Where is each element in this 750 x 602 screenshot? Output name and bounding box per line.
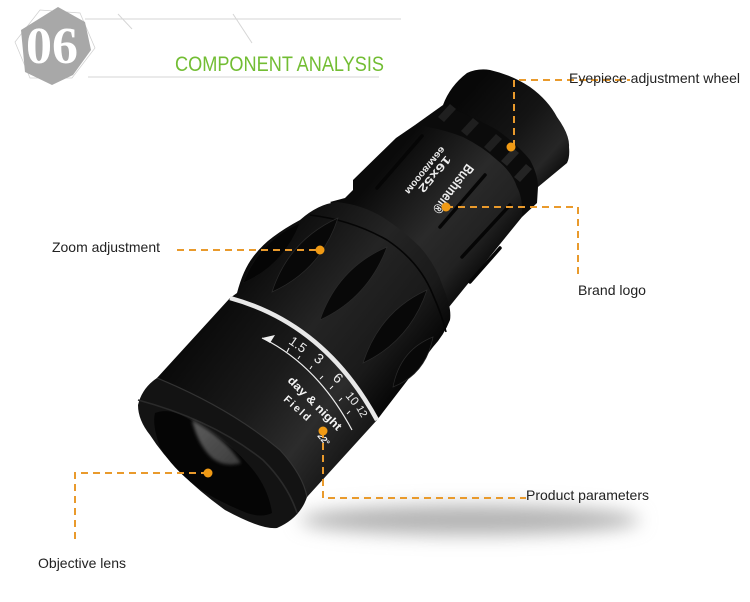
scale line: 3 [311,350,327,367]
front rubber hood [138,378,307,528]
objective lens [154,411,272,516]
scale line: 12 [353,404,370,420]
body print: brand and specs: Bushnell® [429,161,477,218]
header badge: 06: 06 [26,18,78,75]
eyepiece wheel [415,104,538,217]
main barrel [157,298,377,497]
zoom ring ribs [243,218,433,387]
callout: zoom adjustment: Zoom adjustment [52,239,160,255]
zoom ring [230,202,450,420]
callout: eyepiece adjustment wheel [506,70,740,152]
body print: brand and specs: 66M/8000M [403,145,446,195]
eyepiece cup [443,69,569,187]
header rules [85,14,401,77]
callout: objective lens [38,468,212,571]
scale line [262,333,370,448]
callout: brand logo: Brand logo [578,282,646,298]
body print: brand and specs [403,145,477,218]
callout: product parameters: Product parameters [526,487,649,503]
scale line: day & night [285,375,344,433]
callout: brand logo [442,202,646,298]
middle body [330,125,522,312]
body grooves [377,136,510,282]
scale line: 22° [315,431,332,448]
body print: brand and specs: 16x52 [415,153,453,194]
monocular illustration [138,69,569,528]
shadow under monocular [300,505,640,535]
callout: product parameters [318,426,649,503]
scale line: 10 [343,389,362,408]
scale line: 1.5 [286,333,310,356]
title: COMPONENT ANALYSIS [175,53,384,76]
callout: eyepiece adjustment wheel: Eyepiece adjustment wheel [569,70,740,86]
callout: zoom adjustment [52,239,324,255]
white ring [230,298,377,420]
callout: objective lens: Objective lens [38,555,126,571]
scale line: Field [281,393,313,424]
header badge: 06 [15,7,95,85]
scale line: 6 [330,369,347,387]
